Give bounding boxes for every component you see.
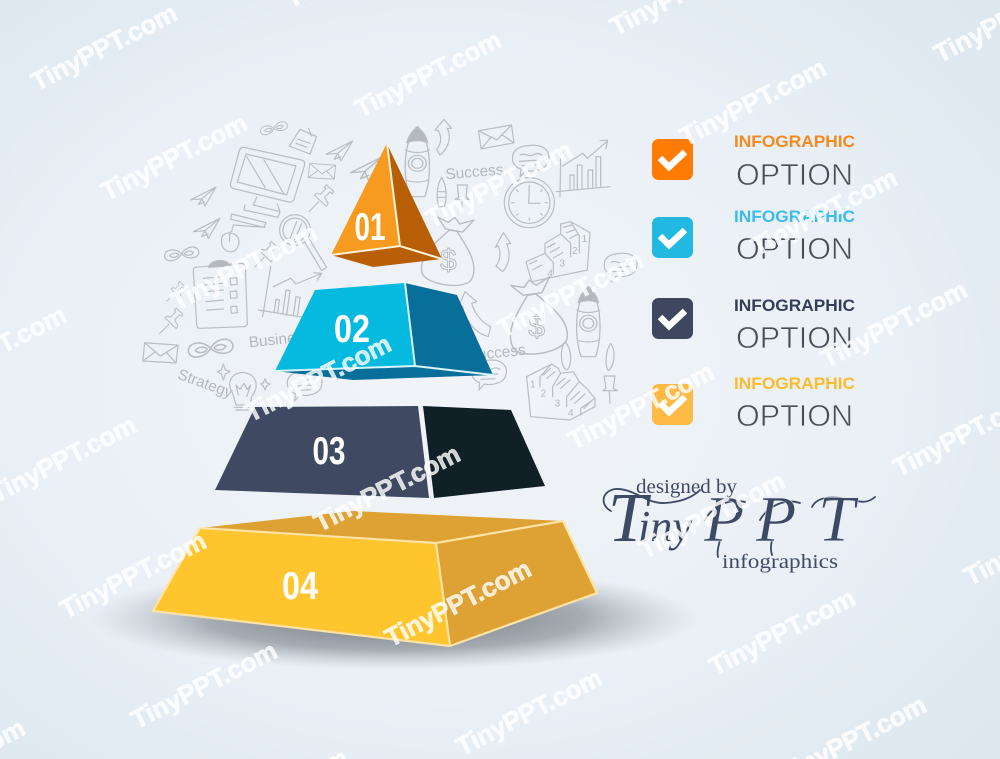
option 2 text: INFOGRAPHIC: [734, 208, 855, 226]
stairs numbers: [547, 234, 588, 280]
designed by text: designed by: [636, 476, 737, 498]
icon: yellow check: [652, 384, 693, 425]
tier 3: navy: [215, 406, 545, 498]
designed by logo: [604, 476, 875, 573]
stairs numbers lower: 4: [568, 408, 574, 419]
icon: clipboard: [193, 260, 247, 328]
logo word TinyPPT: iny: [638, 502, 692, 551]
watermarks: TinyPPT.com: [704, 582, 860, 682]
icon: infinity top: [259, 120, 288, 136]
icon: money bag center: $: [440, 244, 457, 277]
watermarks: TinyPPT.com: [492, 244, 648, 344]
option 2 text: [734, 208, 855, 266]
icon: stairs right: [526, 222, 590, 282]
stairs numbers lower: 2: [541, 389, 547, 400]
icon: speech bubble right: [604, 253, 637, 282]
doodle background illustrations: [142, 119, 637, 420]
icon: pin middle: [255, 241, 278, 267]
option 4: [652, 375, 855, 433]
stairs numbers: 4: [547, 269, 553, 280]
icon: blue check: [652, 217, 693, 258]
icon: speech bubble lower: [472, 360, 506, 390]
icon: money bag right: $: [528, 311, 545, 344]
icon: plane behind tip: [351, 157, 383, 181]
option 3 text: OPTION: [736, 320, 853, 355]
logo word TinyPPT: [604, 480, 875, 557]
watermarks: TinyPPT.com: [166, 217, 322, 317]
number 01: 01: [354, 206, 386, 249]
label: Success lower: Success: [467, 342, 527, 365]
stairs numbers: 3: [559, 259, 565, 270]
icon: infinity lower: [187, 338, 234, 358]
icon: bar chart left: [258, 267, 322, 318]
number 02: 02: [334, 308, 370, 351]
option 3: [652, 297, 855, 355]
watermarks: TinyPPT.com: [126, 635, 282, 735]
options legend: [652, 133, 855, 433]
icon: planes left: [191, 187, 220, 238]
watermarks: TinyPPT.com: [55, 525, 211, 625]
watermarks: TinyPPT.com: [746, 162, 902, 262]
watermarks: TinyPPT.com: [816, 274, 972, 374]
icon: envelope: [308, 162, 336, 181]
watermarks: TinyPPT.com: [675, 52, 831, 152]
icon: rocket top: [405, 127, 429, 197]
icon: clock: [504, 178, 554, 228]
icon: envelope top right: [478, 125, 514, 149]
icon: monitor: [230, 147, 305, 227]
icon: note: [289, 128, 317, 154]
watermarks: TinyPPT.com: [380, 553, 536, 653]
icon: money bag center: [419, 214, 481, 289]
stairs numbers: 2: [572, 246, 578, 257]
watermarks: TinyPPT.com: [563, 356, 719, 456]
label: Success: Success: [445, 161, 504, 183]
stairs numbers lower: 1: [530, 379, 536, 390]
icon: bar chart right: [556, 140, 610, 197]
label: Business: Business: [248, 328, 312, 351]
icon: light bulb: [230, 373, 256, 410]
stairs numbers: 1: [582, 234, 588, 245]
icon: stairs lower: [527, 364, 595, 420]
tier 4: yellow: [153, 511, 597, 646]
icon: curved arrow: [495, 233, 511, 272]
icon: mouse: [221, 225, 265, 252]
icon: money bag right: [501, 275, 570, 358]
icon: speech bubble: [512, 145, 549, 177]
ground shadow: [90, 566, 700, 670]
infographics text: infographics: [722, 551, 838, 573]
stairs numbers lower: 3: [555, 399, 561, 410]
icon: arrow center: [458, 292, 491, 337]
stairs numbers lower: [530, 379, 574, 419]
icon: pin: [309, 185, 334, 212]
icon: arrow up: [435, 119, 452, 155]
logo word TinyPPT: T: [608, 480, 652, 557]
pyramid: [153, 143, 597, 646]
tier 2: blue: [275, 283, 493, 380]
watermarks: TinyPPT.com: [96, 107, 252, 207]
icon: pins left: [160, 282, 185, 334]
option 2: [652, 208, 855, 266]
icon: small rocket and pin: [437, 177, 470, 212]
watermarks: TinyPPT.com: [421, 134, 577, 234]
number 04: 04: [282, 565, 318, 608]
option 1 text: [734, 133, 855, 192]
icon: speech bubble left: [287, 371, 322, 401]
label: Strategy: Strategy: [175, 366, 235, 402]
icon: sparkle stars: [217, 364, 270, 390]
option 1 text: INFOGRAPHIC: [734, 133, 855, 151]
icon: paper plane top: [326, 141, 353, 161]
watermarks: TinyPPT.com: [26, 0, 182, 97]
option 2 text: OPTION: [736, 231, 853, 266]
watermarks: TinyPPT.com: [634, 465, 790, 565]
option 3 text: INFOGRAPHIC: [734, 297, 855, 315]
watermarks: TinyPPT.com: [350, 24, 506, 124]
option 1: [652, 133, 855, 192]
option 3 text: [734, 297, 855, 355]
icon: rocket right: [561, 287, 614, 371]
icon: magnifier: [280, 215, 327, 271]
tier 1: orange tip: [331, 143, 442, 267]
watermarks: TinyPPT.com: [309, 438, 465, 538]
logo word TinyPPT: PPT: [703, 483, 859, 556]
icon: pin right: [603, 376, 617, 403]
watermarks: TinyPPT.com: [451, 662, 607, 759]
number 03: 03: [312, 430, 346, 473]
option 4 text: INFOGRAPHIC: [734, 375, 855, 393]
icon: orange check: [652, 139, 693, 180]
icon: infinity left: [164, 246, 200, 262]
option 4 text: OPTION: [736, 398, 853, 433]
option 1 text: OPTION: [736, 157, 853, 192]
icon: navy check: [652, 298, 693, 339]
icon: envelope left: [142, 340, 179, 366]
option 4 text: [734, 375, 855, 433]
watermarks: TinyPPT.com: [240, 328, 396, 428]
